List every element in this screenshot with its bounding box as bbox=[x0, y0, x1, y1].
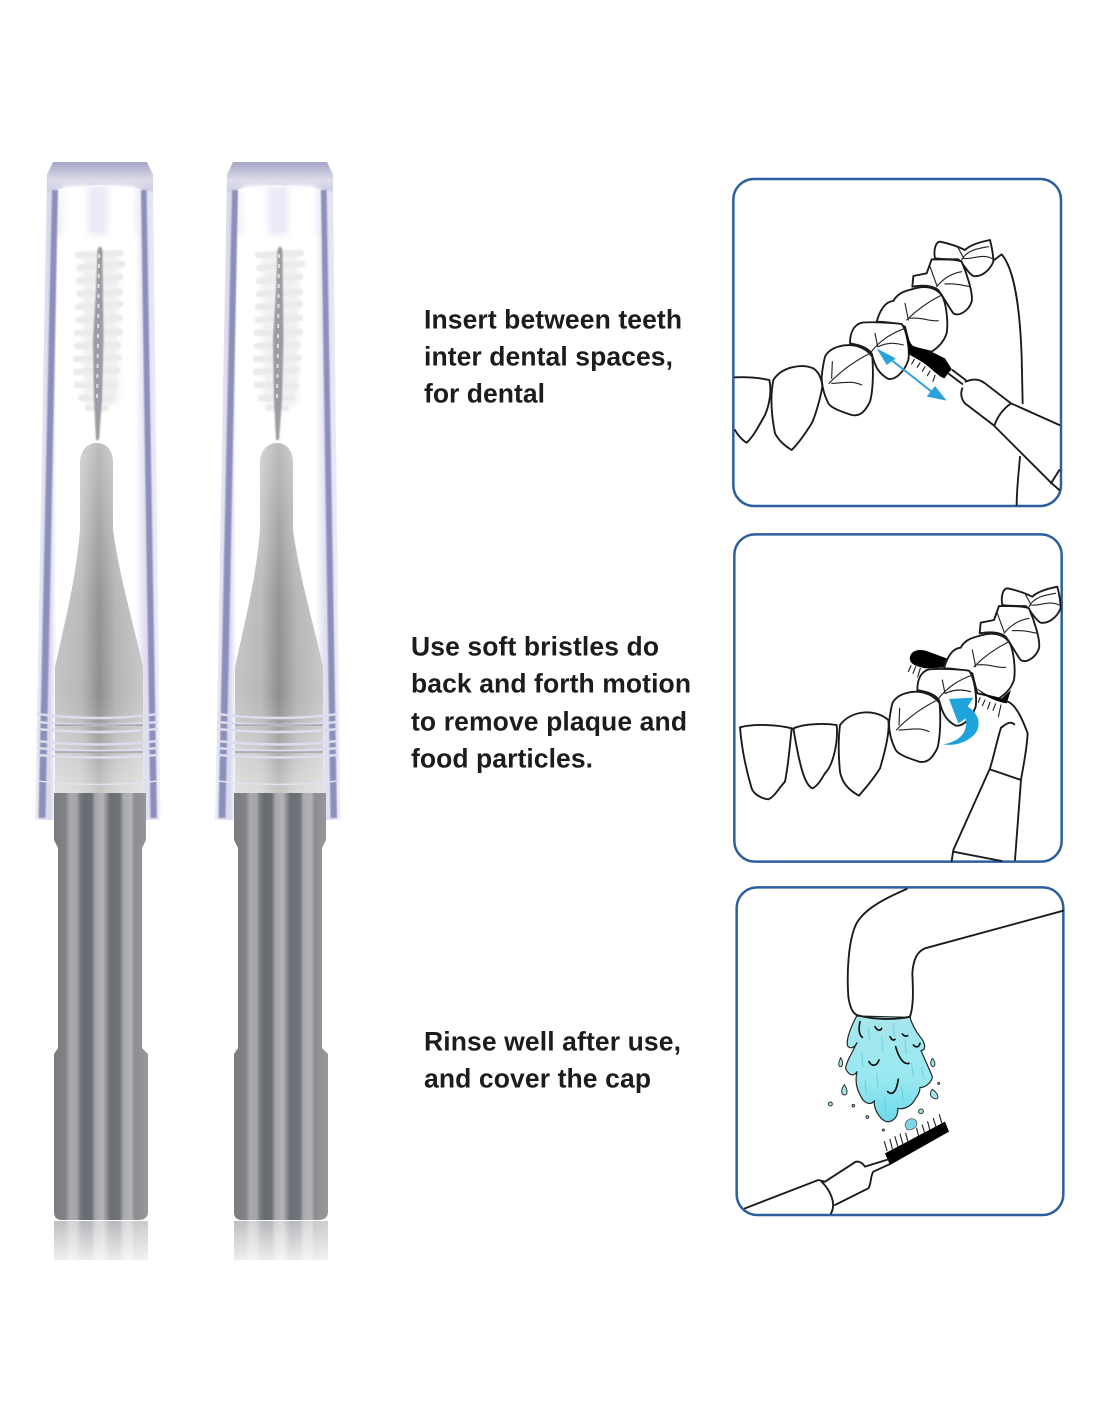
text block: step 2: food particles. bbox=[411, 744, 593, 774]
brush handle bbox=[961, 380, 1059, 490]
text block: step 1: inter dental spaces, bbox=[424, 342, 673, 372]
teeth bbox=[889, 587, 1061, 762]
text block: step 2 bbox=[411, 632, 691, 774]
text block: step 2: Use soft bristles do bbox=[411, 632, 659, 662]
brush head front bbox=[975, 687, 1011, 717]
text block: step 1: Insert between teeth bbox=[424, 304, 682, 334]
arrow: curved bbox=[943, 698, 979, 745]
brush head bbox=[906, 329, 966, 384]
front teeth bbox=[740, 712, 889, 799]
panel: step 3 rinse under faucet bbox=[737, 887, 1063, 1215]
water stream bbox=[846, 1016, 932, 1122]
text block: step 3: and cover the cap bbox=[424, 1064, 651, 1094]
text block: step 3 bbox=[424, 1026, 681, 1094]
panel: step 1 insert brush between teeth bbox=[733, 179, 1061, 506]
arrow: back and forth bbox=[877, 348, 947, 401]
text block: step 1 bbox=[424, 304, 682, 408]
text block: step 2: to remove plaque and bbox=[411, 706, 687, 736]
teeth bbox=[822, 240, 993, 415]
faucet bbox=[848, 889, 1063, 1019]
gum line bbox=[993, 254, 1023, 505]
brush product: right bbox=[215, 162, 340, 1261]
brush behind teeth bbox=[908, 650, 947, 677]
brush handle bbox=[745, 1159, 890, 1213]
brush product: left bbox=[35, 162, 160, 1261]
water droplets bbox=[828, 1058, 940, 1131]
front teeth bbox=[735, 366, 822, 450]
text block: step 2: back and forth motion bbox=[411, 668, 691, 698]
brush head bbox=[884, 1115, 949, 1165]
text block: step 1: for dental bbox=[424, 378, 545, 408]
brush handle bbox=[952, 702, 1028, 861]
panel: step 2 soft bristles motion bbox=[734, 534, 1062, 862]
text block: step 3: Rinse well after use, bbox=[424, 1026, 681, 1056]
